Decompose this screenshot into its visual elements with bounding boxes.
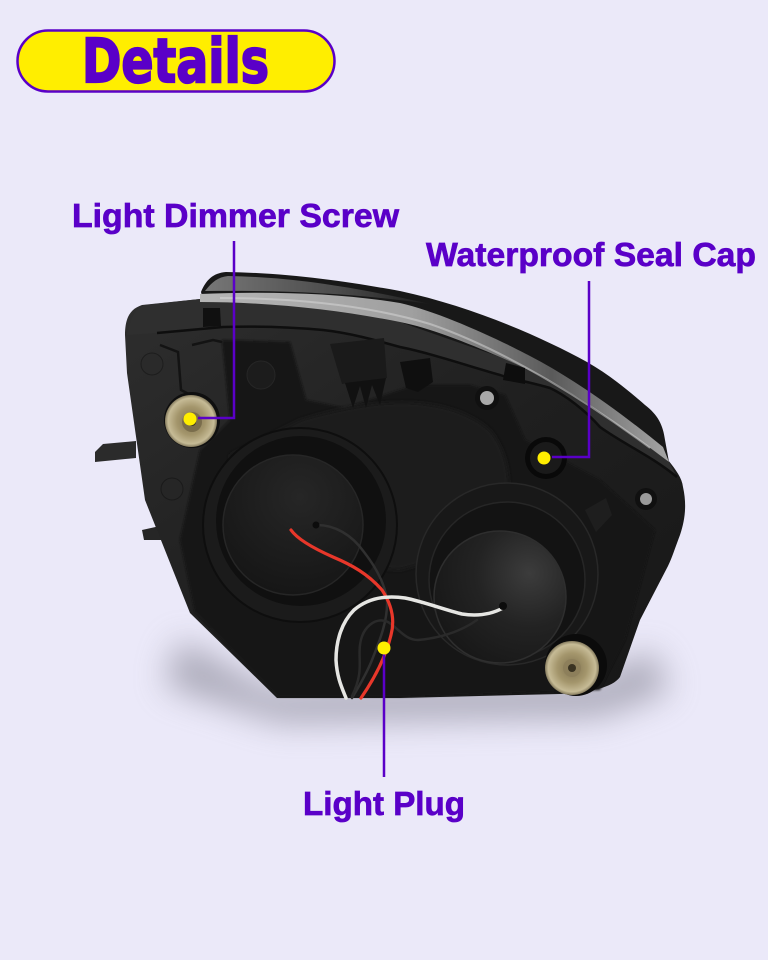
label: Waterproof Seal Cap [426,236,756,273]
dark back plate [180,340,655,697]
label: Light Dimmer Screw [72,197,399,234]
marker [184,412,196,426]
upper flange band [127,299,677,477]
callout: waterproof seal cap [426,236,756,464]
left mounting tab [95,441,136,462]
headlight photo [95,272,685,722]
marker [538,452,550,464]
title badge: Details [82,26,269,97]
right bulb cap [416,483,612,665]
wires [291,522,507,698]
lower screw [545,634,607,696]
callout: light dimmer screw [72,197,399,426]
leader line [198,241,234,418]
leader line [552,281,589,457]
leader line [383,650,385,777]
label: Light Plug [303,785,465,822]
housing body [125,299,685,698]
flange inner edge [157,327,677,477]
callout: light plug [303,642,465,822]
ground shadow [165,640,670,722]
screws [475,386,499,410]
dimmer screw [164,392,220,448]
seal cap [525,437,567,479]
marker [378,642,390,654]
left bulb cap [203,428,397,622]
central dome [230,402,509,570]
clips [203,308,221,327]
left bracket details [160,340,222,430]
lens [200,272,669,462]
